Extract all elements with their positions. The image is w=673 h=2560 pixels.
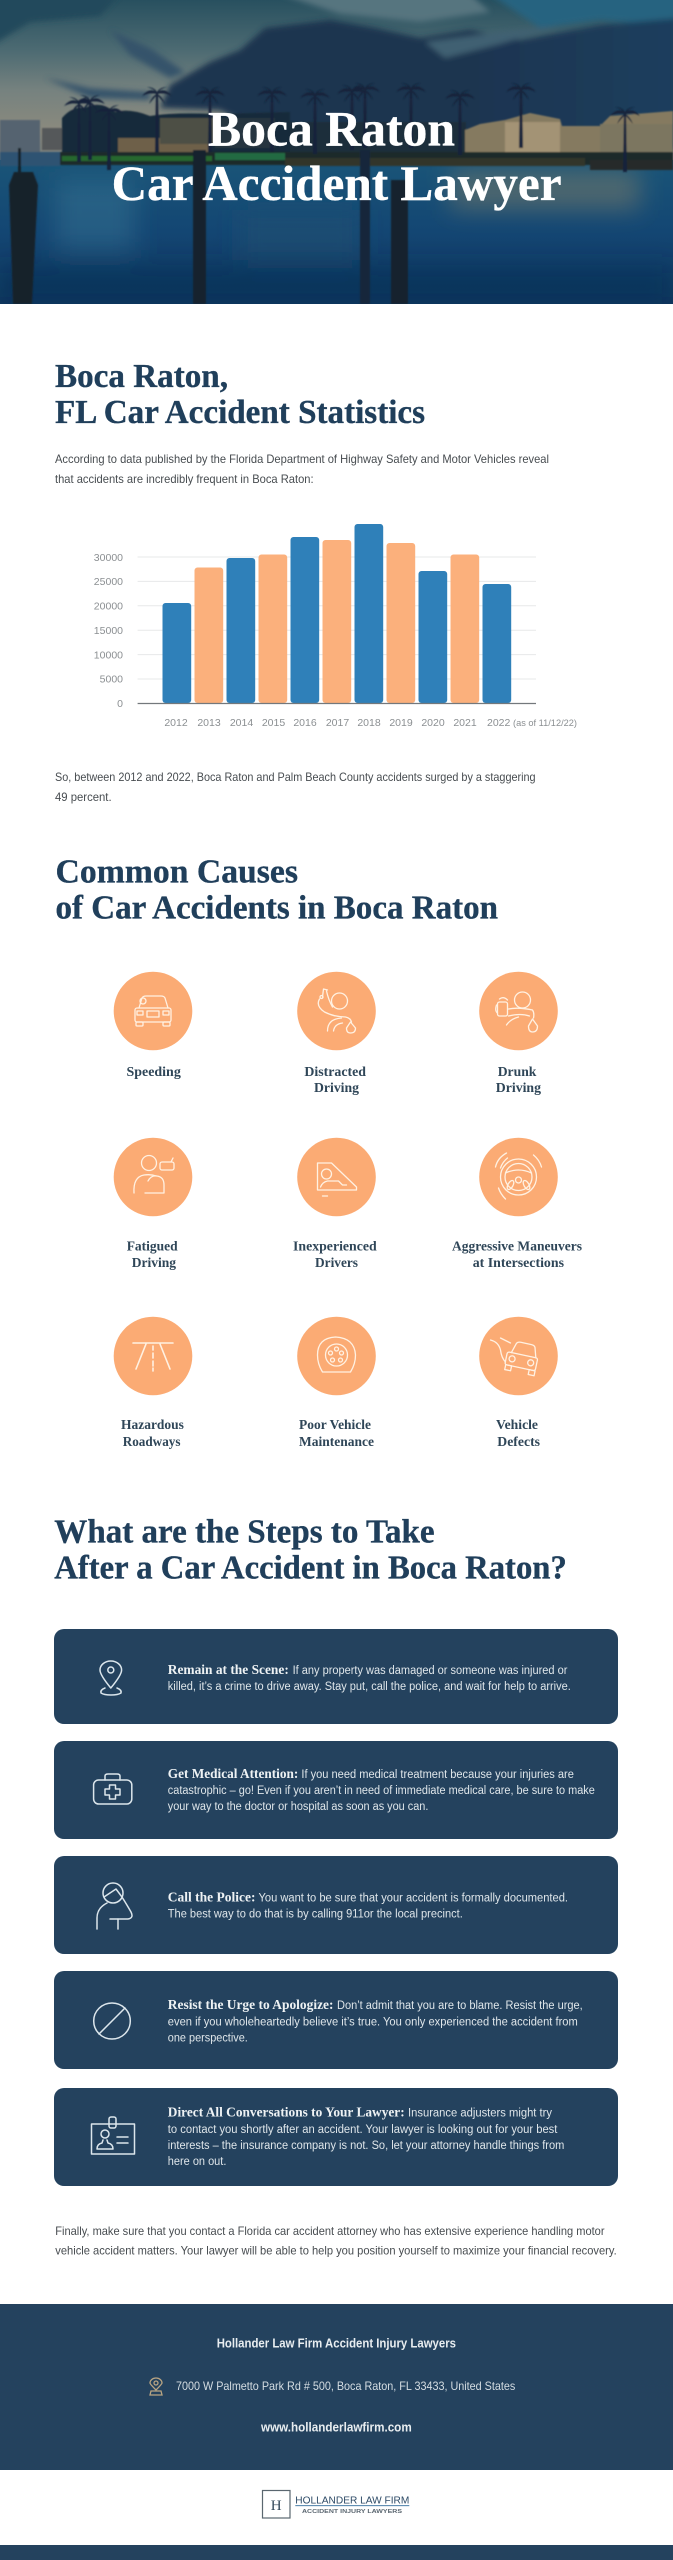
cause: fatigued driving: Driving xyxy=(132,1256,176,1271)
panel: header photo banner xyxy=(0,0,673,305)
panel: step 5 direct conversations to lawyer: interests – the insurance company is not. So, let your attorney handle things from xyxy=(168,2140,564,2152)
bar chart: accidents per year: 2019 xyxy=(389,717,413,729)
panel: step 2 get medical attention: catastrophic – go! Even if you aren’t in need of immediate medical care, be sure to make xyxy=(168,1785,595,1797)
bar chart: accidents per year: 2014 xyxy=(230,717,253,729)
heading: statistics xyxy=(55,358,425,431)
heading: statistics: Boca Raton, xyxy=(55,358,228,395)
icon: id badge xyxy=(92,2117,134,2154)
cause: poor vehicle maintenance: Maintenance xyxy=(299,1435,374,1450)
logo: Hollander Law Firm: HOLLANDER LAW FIRM xyxy=(295,2495,409,2506)
cause: inexperienced drivers: Inexperienced xyxy=(293,1240,377,1255)
cause: speeding xyxy=(114,972,192,1080)
bar chart: accidents per year xyxy=(94,524,577,729)
title: Car Accident Lawyer xyxy=(112,155,562,211)
heading: statistics: FL Car Accident Statistics xyxy=(55,394,425,431)
cause: vehicle defects xyxy=(479,1317,558,1450)
logo: Hollander Law Firm: H xyxy=(271,2498,282,2514)
panel: footer contact band xyxy=(0,2304,673,2470)
title xyxy=(112,101,562,211)
bar chart: accidents per year: 10000 xyxy=(94,650,123,662)
panel: causes grid xyxy=(114,972,583,1450)
cause: aggressive maneuvers: at Intersections xyxy=(473,1256,565,1271)
cause: distracted driving xyxy=(297,972,376,1096)
firm name: Hollander Law Firm Accident Injury Lawyers xyxy=(217,2336,456,2350)
panel: step 4 resist the urge to apologize: one perspective. xyxy=(168,2033,248,2045)
bar chart: accidents per year: 0 xyxy=(117,698,123,710)
logo: Hollander Law Firm: ACCIDENT INJURY LAWYERS xyxy=(302,2509,402,2515)
heading: common causes: Common Causes xyxy=(56,854,298,891)
cause: drunk driving: Driving xyxy=(496,1081,541,1096)
bar chart: accidents per year: 2022 xyxy=(487,717,511,729)
text block: statistics intro: that accidents are incredibly frequent in Boca Raton: xyxy=(55,472,314,486)
icon: person on phone xyxy=(97,1883,132,1929)
text block: statistics conclusion: 49 percent. xyxy=(55,790,112,804)
cause: inexperienced drivers xyxy=(293,1138,377,1271)
cause: drunk driving xyxy=(479,972,558,1096)
heading: common causes xyxy=(56,854,498,927)
heading: steps: What are the Steps to Take xyxy=(54,1514,435,1551)
panel: step 5 direct conversations to lawyer: to contact you shortly after an accident. Your lawyer is looking out for your best xyxy=(168,2124,558,2136)
panel: step 5 direct conversations to lawyer: here on out. xyxy=(168,2156,226,2168)
icon: medical kit xyxy=(94,1774,132,1804)
panel: step 4 resist the urge to apologize: even if you wholeheartedly believe it’s true. You only experienced the accident from xyxy=(168,2017,578,2029)
title: Boca Raton xyxy=(208,101,455,157)
bar chart: accidents per year: 25000 xyxy=(94,576,123,588)
heading: common causes: of Car Accidents in Boca Raton xyxy=(56,890,498,927)
bar chart: accidents per year: 2021 xyxy=(453,717,477,729)
panel: step 1 remain at the scene xyxy=(54,1629,618,1724)
website: www.hollanderlawfirm.com xyxy=(260,2421,412,2435)
cause: fatigued driving xyxy=(114,1138,192,1271)
panel: step 3 call the police: You want to be sure that your accident is formally documented. xyxy=(258,1893,568,1905)
cause: vehicle defects: Defects xyxy=(497,1435,541,1450)
cause: speeding: Speeding xyxy=(126,1065,181,1080)
panel: step 1 remain at the scene: killed, it’s a crime to drive away. Stay put, call the police, and wait for help to arrive. xyxy=(168,1681,571,1693)
heading: steps xyxy=(54,1514,567,1587)
bar chart: accidents per year: 2016 xyxy=(293,717,317,729)
bar chart: accidents per year: 2018 xyxy=(357,717,381,729)
icon: address pin xyxy=(150,2378,162,2395)
cause: aggressive maneuvers xyxy=(452,1138,583,1271)
panel: step 4 resist the urge to apologize: Don’t admit that you are to blame. Resist the urge, xyxy=(337,2000,583,2012)
bar chart: accidents per year: 2020 xyxy=(421,717,445,729)
bar chart: accidents per year: 2015 xyxy=(262,717,285,729)
panel: step 4 resist the urge to apologize: Resist the Urge to Apologize: xyxy=(168,1997,334,2012)
logo: Hollander Law Firm xyxy=(262,2490,409,2518)
panel: step 2 get medical attention: If you need medical treatment because your injuries are xyxy=(301,1769,574,1781)
text block: statistics intro xyxy=(55,452,549,486)
bar chart: accidents per year: (as of 11/12/22) xyxy=(513,718,577,729)
panel: step 3 call the police: The best way to do that is by calling 911or the local precinct. xyxy=(168,1909,463,1921)
text block: closing paragraph xyxy=(55,2224,617,2258)
panel: bottom band xyxy=(0,2545,673,2560)
panel: step 2 get medical attention: Get Medical Attention: xyxy=(168,1766,298,1781)
panel: step 5 direct conversations to lawyer: Direct All Conversations to Your Lawyer: xyxy=(168,2105,405,2120)
text block: statistics conclusion: So, between 2012 and 2022, Boca Raton and Palm Beach County accidents surged by a staggering xyxy=(55,770,536,784)
bar chart: accidents per year: 30000 xyxy=(94,552,123,564)
cause: aggressive maneuvers: Aggressive Maneuvers xyxy=(452,1240,583,1255)
text block: closing paragraph: Finally, make sure that you contact a Florida car accident attorney who has extensive experience handling motor xyxy=(55,2224,605,2238)
panel: step 5 direct conversations to lawyer xyxy=(54,2088,618,2186)
cause: vehicle defects: Vehicle xyxy=(496,1418,538,1433)
text block: statistics intro: According to data published by the Florida Department of Highway Safety and Motor Vehicles reveal xyxy=(55,452,549,466)
icon: prohibited sign xyxy=(94,2003,130,2039)
cause: drunk driving: Drunk xyxy=(498,1065,537,1080)
panel: step 2 get medical attention: your way to the doctor or hospital as soon as you can. xyxy=(168,1801,428,1813)
cause: hazardous roadways xyxy=(114,1317,192,1450)
cause: poor vehicle maintenance: Poor Vehicle xyxy=(299,1418,371,1433)
cause: distracted driving: Distracted xyxy=(304,1065,366,1080)
heading: steps: After a Car Accident in Boca Raton? xyxy=(54,1550,567,1587)
cause: fatigued driving: Fatigued xyxy=(127,1240,178,1255)
bar chart: accidents per year: 5000 xyxy=(100,674,123,686)
panel: step 2 get medical attention xyxy=(54,1741,618,1839)
cause: inexperienced drivers: Drivers xyxy=(315,1256,359,1271)
panel: step 4 resist the urge to apologize xyxy=(54,1971,618,2069)
panel: step 3 call the police: Call the Police: xyxy=(168,1890,256,1905)
icon: map pin xyxy=(100,1661,122,1695)
cause: hazardous roadways: Roadways xyxy=(123,1435,181,1450)
address: 7000 W Palmetto Park Rd # 500, Boca Raton, FL 33433, United States xyxy=(176,2379,515,2393)
panel: step 3 call the police xyxy=(54,1856,618,1954)
bar chart: accidents per year: 2013 xyxy=(197,717,221,729)
text block: statistics conclusion xyxy=(55,770,536,804)
cause: poor vehicle maintenance xyxy=(297,1317,376,1450)
cause: hazardous roadways: Hazardous xyxy=(121,1418,184,1433)
panel: step 5 direct conversations to lawyer: Insurance adjusters might try xyxy=(408,2108,552,2120)
cause: distracted driving: Driving xyxy=(314,1081,359,1096)
panel: step 1 remain at the scene: Remain at the Scene: xyxy=(168,1662,289,1677)
text block: closing paragraph: vehicle accident matters. Your lawyer will be able to help you position yourself to maximize your financial recovery. xyxy=(55,2244,617,2258)
bar chart: accidents per year: 2017 xyxy=(326,717,349,729)
bar chart: accidents per year: 20000 xyxy=(94,600,123,612)
bar chart: accidents per year: 2012 xyxy=(164,717,188,729)
panel: step 1 remain at the scene: If any property was damaged or someone was injured or xyxy=(293,1665,568,1677)
bar chart: accidents per year: 15000 xyxy=(94,625,123,637)
